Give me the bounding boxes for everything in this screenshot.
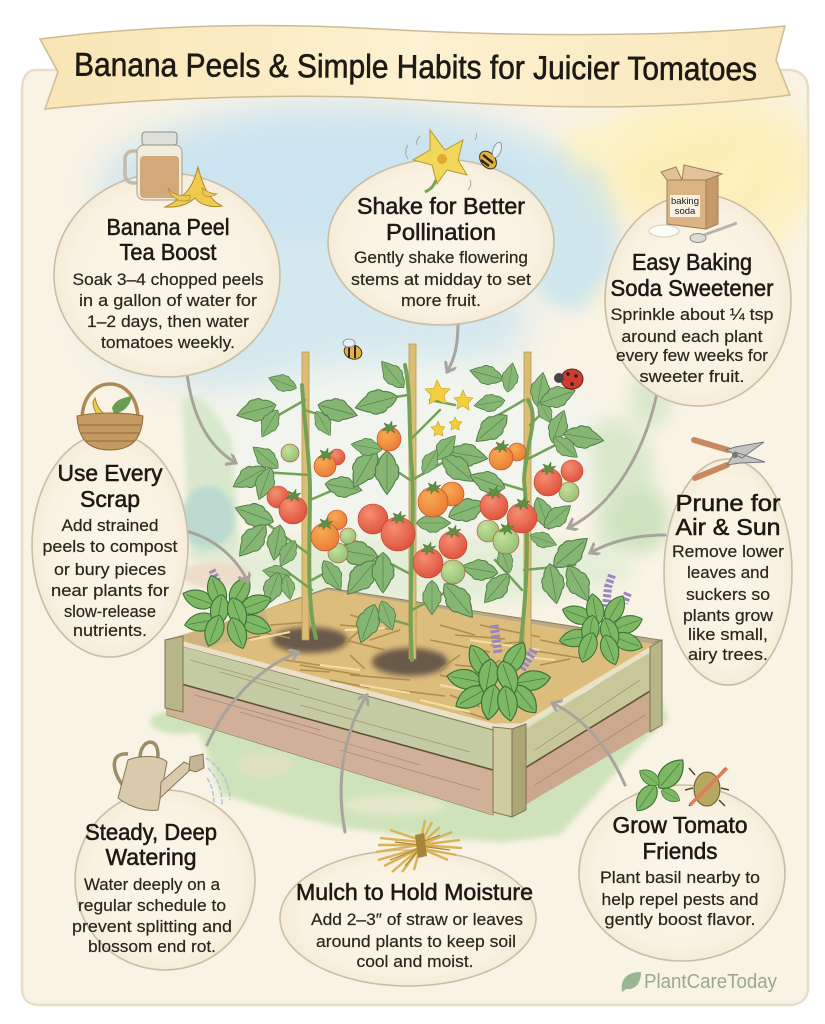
- panel: use every scrap: or bury pieces: [54, 560, 166, 579]
- panel: grow tomato friends: gently boost flavor.: [604, 910, 756, 929]
- panel: shake for better pollination: Gently shake flowering: [354, 248, 528, 267]
- panel: grow tomato friends: help repel pests and: [602, 890, 758, 909]
- icon: pruning shears: [694, 440, 765, 478]
- panel: banana peel tea boost: in a gallon of water for: [79, 291, 257, 310]
- panel: use every scrap: slow-release: [64, 602, 156, 621]
- stakes: [302, 344, 531, 659]
- panel: steady deep watering: [72, 790, 255, 970]
- panel: shake for better pollination: more fruit.: [401, 291, 481, 310]
- panel: mulch to hold moisture: [280, 850, 536, 986]
- panel: steady deep watering: blossom end rot.: [88, 937, 216, 956]
- panel: easy baking soda sweetener: [605, 194, 791, 406]
- panel: prune for air and sun: like small,: [688, 625, 768, 644]
- panel: easy baking soda sweetener: every few weeks for: [616, 346, 768, 365]
- banner title: Banana Peels & Simple Habits for Juicier Tomatoes: [74, 46, 757, 87]
- icon: basket with banana peels: [77, 384, 143, 450]
- icon: basil leaf and crossed-out beetle: [630, 754, 729, 816]
- icon: jar of banana tea with peel: [125, 132, 222, 207]
- panel: mulch to hold moisture: Mulch to Hold Moisture: [296, 879, 533, 905]
- panel: shake for better pollination: [328, 159, 554, 325]
- panel: shake for better pollination: Shake for Better: [357, 193, 525, 219]
- raised garden bed: [165, 588, 662, 817]
- panel: use every scrap: nutrients.: [73, 621, 147, 640]
- icon: yellow flower and bee: [406, 130, 503, 192]
- panel: shake for better pollination: stems at midday to set: [351, 270, 531, 289]
- panel: steady deep watering: Watering: [106, 844, 196, 870]
- panel: prune for air and sun: Remove lower: [672, 542, 784, 561]
- panel: prune for air and sun: Air & Sun: [676, 514, 780, 540]
- panel: prune for air and sun: suckers so: [686, 585, 770, 604]
- stems: [262, 365, 575, 660]
- tomatoes: [267, 427, 583, 584]
- panel: grow tomato friends: [579, 785, 785, 961]
- panel: mulch to hold moisture: Add 2–3″ of straw or leaves: [311, 910, 523, 929]
- icon: bee near plants: [342, 339, 364, 362]
- panel: banana peel tea boost: Banana Peel: [106, 214, 230, 240]
- basil plants: [180, 570, 645, 722]
- panel: steady deep watering: regular schedule to: [78, 896, 226, 915]
- logo: PlantCareToday: PlantCareToday: [644, 971, 777, 993]
- panel: banana peel tea boost: [54, 173, 280, 377]
- panel: grow tomato friends: Grow Tomato: [612, 812, 748, 838]
- panel: banana peel tea boost: 1–2 days, then water: [87, 312, 249, 331]
- panel: use every scrap: peels to compost: [42, 537, 178, 556]
- panel: grow tomato friends: Friends: [642, 838, 718, 864]
- panel: easy baking soda sweetener: Sprinkle about ¼ tsp: [610, 305, 774, 324]
- icon: straw bundle: [376, 820, 462, 872]
- tomato calyxes: [286, 421, 556, 555]
- panel: use every scrap: Add strained: [62, 516, 158, 535]
- panel: prune for air and sun: plants grow: [683, 606, 774, 625]
- panel: use every scrap: Use Every: [58, 460, 163, 486]
- icon: ladybug: [554, 369, 583, 389]
- grey arrows: [180, 322, 665, 832]
- panel: steady deep watering: Water deeply on a: [84, 875, 221, 894]
- icon: baking soda box and spoon: soda: [675, 206, 696, 217]
- panel: steady deep watering: prevent splitting and: [72, 917, 232, 936]
- panel: banana peel tea boost: tomatoes weekly.: [101, 333, 235, 352]
- tomato flowers: [425, 380, 473, 436]
- icon: baking soda box and spoon: baking: [671, 196, 699, 207]
- banner title: [40, 25, 790, 109]
- panel: prune for air and sun: airy trees.: [688, 645, 768, 664]
- leaves: [228, 356, 605, 646]
- panel: mulch to hold moisture: around plants to keep soil: [316, 932, 516, 951]
- panel: easy baking soda sweetener: Easy Baking: [632, 249, 752, 275]
- watercolor scene: sky, sun glow and distant greenery: [90, 100, 820, 842]
- panel: prune for air and sun: Prune for: [676, 490, 781, 516]
- icon: watering can: [114, 742, 230, 810]
- panel: use every scrap: [32, 433, 188, 657]
- panel: banana peel tea boost: Soak 3–4 chopped peels: [72, 270, 264, 289]
- grass: [165, 690, 668, 842]
- panel: steady deep watering: Steady, Deep: [85, 819, 217, 845]
- tomato plants with stakes: [228, 344, 605, 660]
- panel: mulch to hold moisture: cool and moist.: [356, 952, 474, 971]
- panel: prune for air and sun: leaves and: [687, 563, 769, 582]
- panel: prune for air and sun: [664, 459, 792, 685]
- panel: use every scrap: Scrap: [80, 486, 140, 512]
- panel: easy baking soda sweetener: sweeter fruit.: [640, 367, 744, 386]
- panel: grow tomato friends: Plant basil nearby to: [600, 868, 760, 887]
- panel: use every scrap: near plants for: [51, 581, 169, 600]
- panel: easy baking soda sweetener: around each plant: [622, 327, 763, 346]
- panel: shake for better pollination: Pollination: [386, 219, 496, 245]
- icon: baking soda box and spoon: [649, 165, 737, 242]
- panel: banana peel tea boost: Tea Boost: [120, 239, 217, 265]
- panel: easy baking soda sweetener: Soda Sweetener: [610, 275, 774, 301]
